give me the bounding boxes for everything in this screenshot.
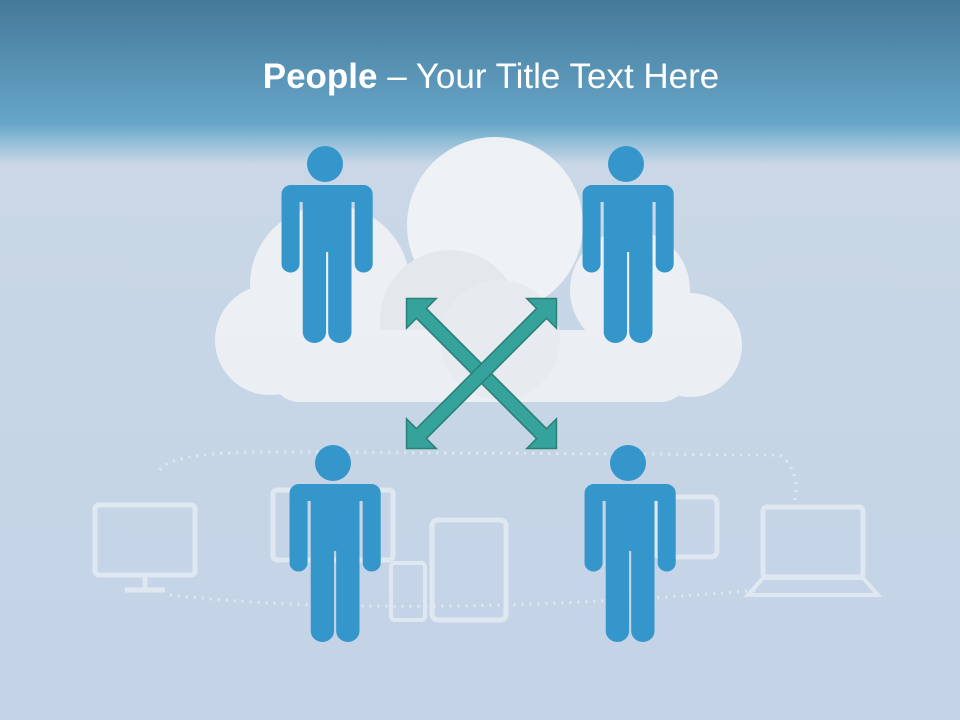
arrows: crossing double arrows [392, 284, 571, 463]
title: People – Your Title Text Here [263, 57, 719, 96]
devices network [95, 452, 878, 620]
header band [0, 0, 960, 165]
person: top right [583, 146, 674, 343]
cloud [215, 137, 742, 402]
person: bottom left [290, 445, 381, 642]
person: top left [282, 146, 373, 343]
person: bottom right [585, 445, 676, 642]
